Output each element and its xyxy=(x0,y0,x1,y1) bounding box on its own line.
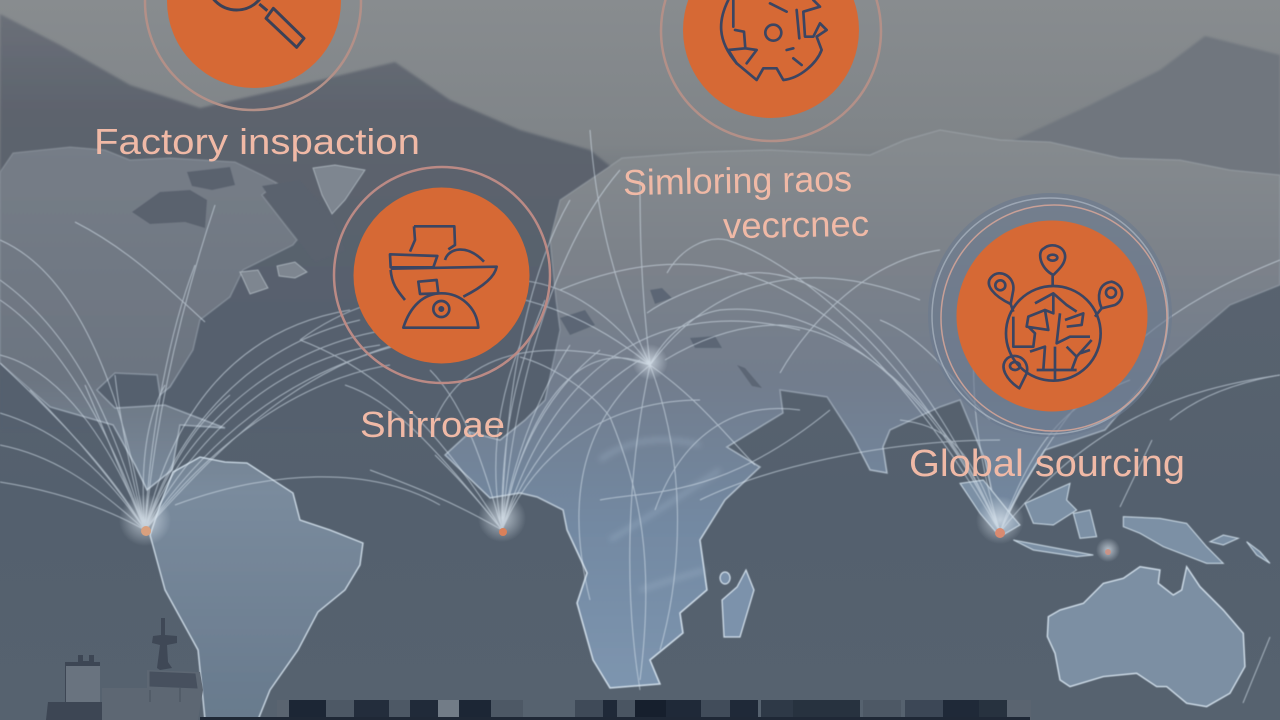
disc xyxy=(683,0,859,118)
caption: Global sourcing: Global sourcing xyxy=(909,443,1185,485)
ring xyxy=(334,167,550,383)
factory inspection badge xyxy=(145,0,361,110)
inner ring xyxy=(941,205,1167,431)
ring xyxy=(661,0,881,141)
land: European islands xyxy=(240,165,365,294)
ship funnel xyxy=(65,655,100,720)
caption: Factory inspaction: Factory inspaction xyxy=(94,121,420,162)
mountains silhouette xyxy=(0,14,1280,430)
ship superstructure xyxy=(102,670,203,720)
disc xyxy=(956,220,1148,412)
land: Indonesia islands xyxy=(960,480,1270,563)
arcs from Middle East hub xyxy=(300,130,1000,690)
route hubs xyxy=(119,344,1120,562)
land: inland seas xyxy=(560,288,762,388)
icon: globe xyxy=(721,0,827,80)
hub: Southeast Asia xyxy=(976,496,1024,544)
caption: vecrcnec: vecrcnec xyxy=(723,203,869,246)
global sourcing badge xyxy=(928,193,1172,437)
shipping route arcs xyxy=(0,130,1280,703)
ship bridge details xyxy=(150,672,197,702)
container row xyxy=(277,700,1031,720)
ring xyxy=(145,0,361,110)
hub: Banda Sea xyxy=(1096,538,1120,562)
container ship xyxy=(46,618,1031,720)
land: Australia xyxy=(1047,567,1245,707)
ship hull xyxy=(46,702,102,720)
arcs from Central America hub xyxy=(0,205,470,530)
caption: Simloring raos: Simloring raos xyxy=(623,158,852,203)
hub: Middle East xyxy=(632,344,668,380)
ship mast xyxy=(152,618,177,670)
disc xyxy=(354,188,530,364)
arcs from Asian hub xyxy=(560,239,1280,703)
land: lighter streaks over Africa xyxy=(600,440,720,590)
land: South America xyxy=(150,457,363,720)
deck line xyxy=(200,717,1030,720)
outer translucent halo xyxy=(928,193,1172,437)
sampling badge xyxy=(661,0,881,141)
icon: globe with location pins xyxy=(989,245,1122,388)
land: North America xyxy=(0,147,297,490)
hub: Atlantic xyxy=(478,494,526,542)
land: Eurasia and Africa xyxy=(445,130,1280,688)
icon: goods on weighing scale xyxy=(390,226,497,328)
land: dark northern seas xyxy=(132,167,345,262)
icon: magnifying glass xyxy=(207,0,304,47)
caption: Shirroae: Shirroae xyxy=(360,404,505,445)
outer ring xyxy=(932,198,1168,434)
disc xyxy=(167,0,341,88)
land: Madagascar xyxy=(720,570,754,637)
scales badge xyxy=(334,167,550,383)
hub: Central America xyxy=(119,494,171,546)
arcs from Atlantic hub xyxy=(300,170,800,530)
